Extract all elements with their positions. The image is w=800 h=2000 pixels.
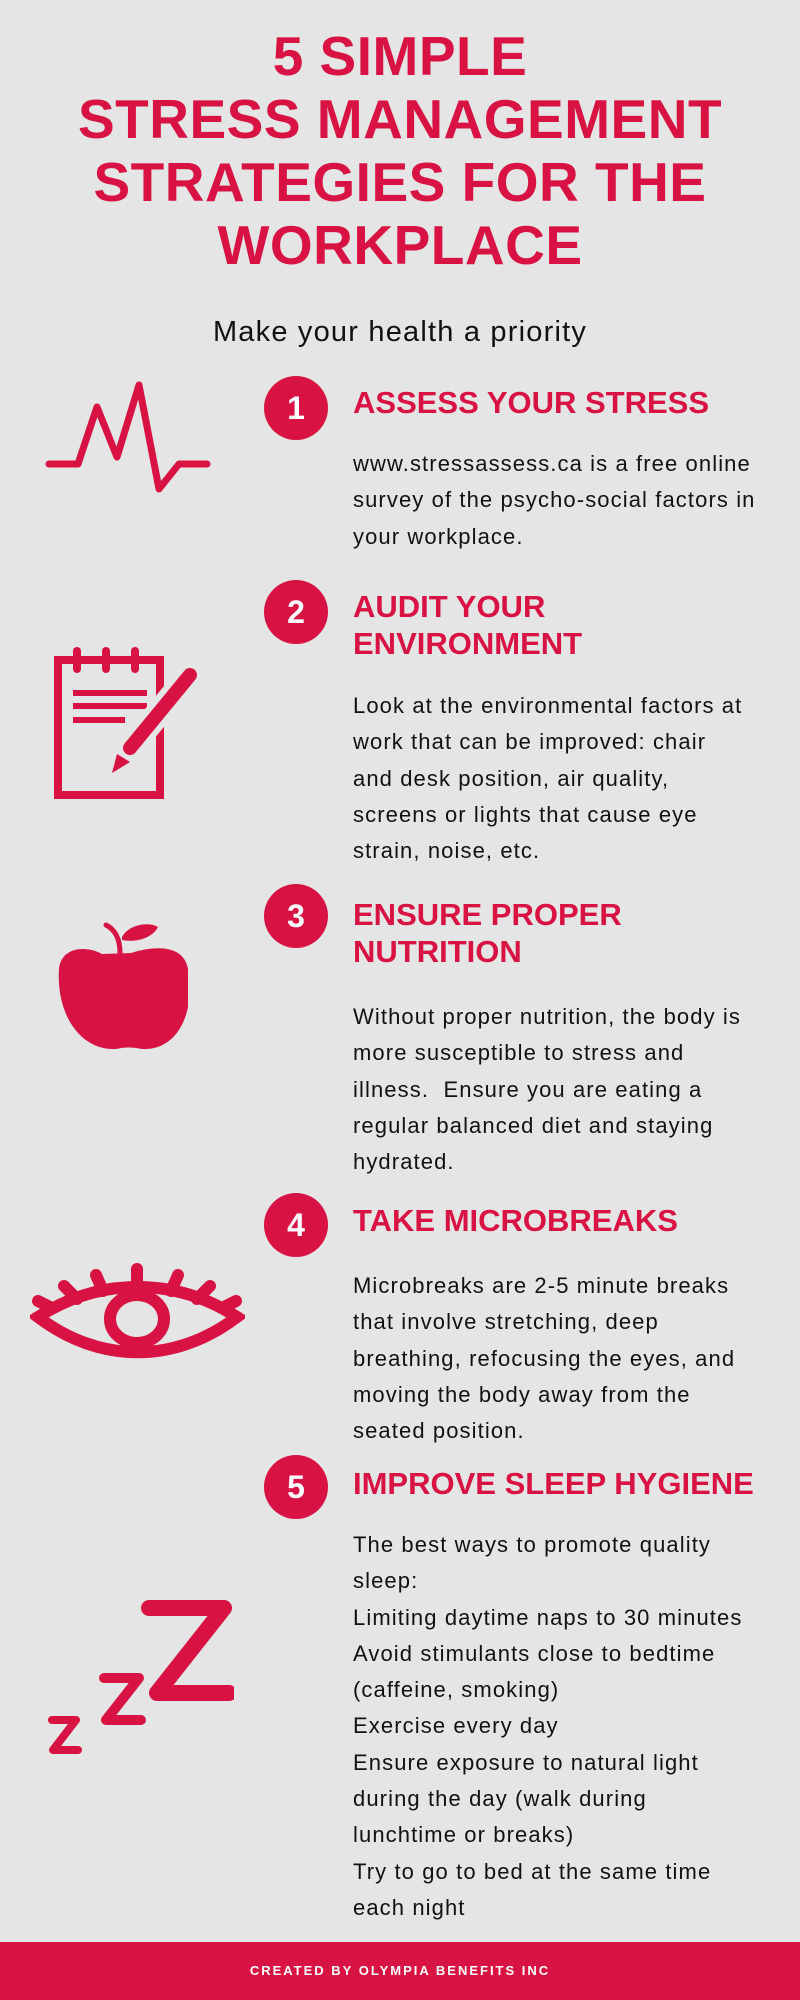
heading 2 — [353, 589, 582, 661]
number 1: 1 — [287, 390, 305, 426]
number 3 — [264, 884, 328, 948]
text 2 — [353, 693, 742, 863]
heading 5: IMPROVE SLEEP HYGIENE — [353, 1466, 754, 1501]
icon: zzz — [48, 1600, 234, 1754]
text 5: Exercise every day — [353, 1713, 559, 1738]
footer — [0, 1942, 800, 2000]
text 5: (caffeine, smoking) — [353, 1677, 559, 1702]
text 2: Look at the environmental factors at — [353, 693, 742, 718]
icon: eye — [30, 1263, 245, 1358]
text 5: sleep: — [353, 1568, 418, 1593]
number 4: 4 — [287, 1207, 305, 1243]
title: 5 SIMPLE — [273, 25, 527, 87]
text 4: that involve stretching, deep — [353, 1309, 659, 1334]
text 4: Microbreaks are 2-5 minute breaks — [353, 1273, 729, 1298]
number 3: 3 — [287, 898, 305, 934]
title: STRATEGIES FOR THE — [93, 151, 706, 213]
text 1: www.stressassess.ca is a free online — [353, 451, 751, 476]
subtitle: Make your health a priority — [213, 316, 587, 348]
title: STRESS MANAGEMENT — [78, 88, 722, 150]
text 1: survey of the psycho-social factors in — [353, 487, 756, 512]
number 4 — [264, 1193, 328, 1257]
text 4: seated position. — [353, 1418, 525, 1443]
text 5: Try to go to bed at the same time — [353, 1859, 711, 1884]
text 5: Ensure exposure to natural light — [353, 1750, 699, 1775]
text 5: each night — [353, 1895, 466, 1920]
title: WORKPLACE — [217, 214, 583, 276]
text 2: strain, noise, etc. — [353, 838, 540, 863]
text 5: The best ways to promote quality — [353, 1532, 711, 1557]
text 3 — [353, 1004, 741, 1174]
text 2: and desk position, air quality, — [353, 766, 669, 791]
text 3: regular balanced diet and staying — [353, 1113, 713, 1138]
text 4: breathing, refocusing the eyes, and — [353, 1346, 735, 1371]
text 5: lunchtime or breaks) — [353, 1822, 574, 1847]
heading 4: TAKE MICROBREAKS — [353, 1203, 678, 1238]
number 2: 2 — [287, 594, 305, 630]
heading 3: NUTRITION — [353, 934, 522, 969]
footer: CREATED BY OLYMPIA BENEFITS INC — [250, 1963, 550, 1978]
icon: notepad — [54, 647, 197, 799]
text 3: more susceptible to stress and — [353, 1040, 684, 1065]
text 3: Without proper nutrition, the body is — [353, 1004, 741, 1029]
text 2: screens or lights that cause eye — [353, 802, 698, 827]
text 2: work that can be improved: chair — [353, 729, 706, 754]
text 5 — [353, 1532, 742, 1920]
text 5: Limiting daytime naps to 30 minutes — [353, 1605, 742, 1630]
number 5 — [264, 1455, 328, 1519]
text 5: Avoid stimulants close to bedtime — [353, 1641, 715, 1666]
text 1 — [353, 451, 756, 549]
heading 2: AUDIT YOUR — [353, 589, 545, 624]
heading 2: ENVIRONMENT — [353, 626, 582, 661]
heading 1: ASSESS YOUR STRESS — [353, 385, 709, 420]
text 4: moving the body away from the — [353, 1382, 691, 1407]
text 4 — [353, 1273, 735, 1443]
text 5: during the day (walk during — [353, 1786, 647, 1811]
text 1: your workplace. — [353, 524, 524, 549]
text 3: illness. Ensure you are eating a — [353, 1077, 702, 1102]
number 5: 5 — [287, 1469, 305, 1505]
icon: heartbeat — [46, 382, 210, 492]
heading 3: ENSURE PROPER — [353, 897, 622, 932]
number 2 — [264, 580, 328, 644]
text 3: hydrated. — [353, 1149, 455, 1174]
heading 3 — [353, 897, 622, 969]
title — [78, 25, 722, 276]
icon: apple — [58, 922, 188, 1050]
number 1 — [264, 376, 328, 440]
